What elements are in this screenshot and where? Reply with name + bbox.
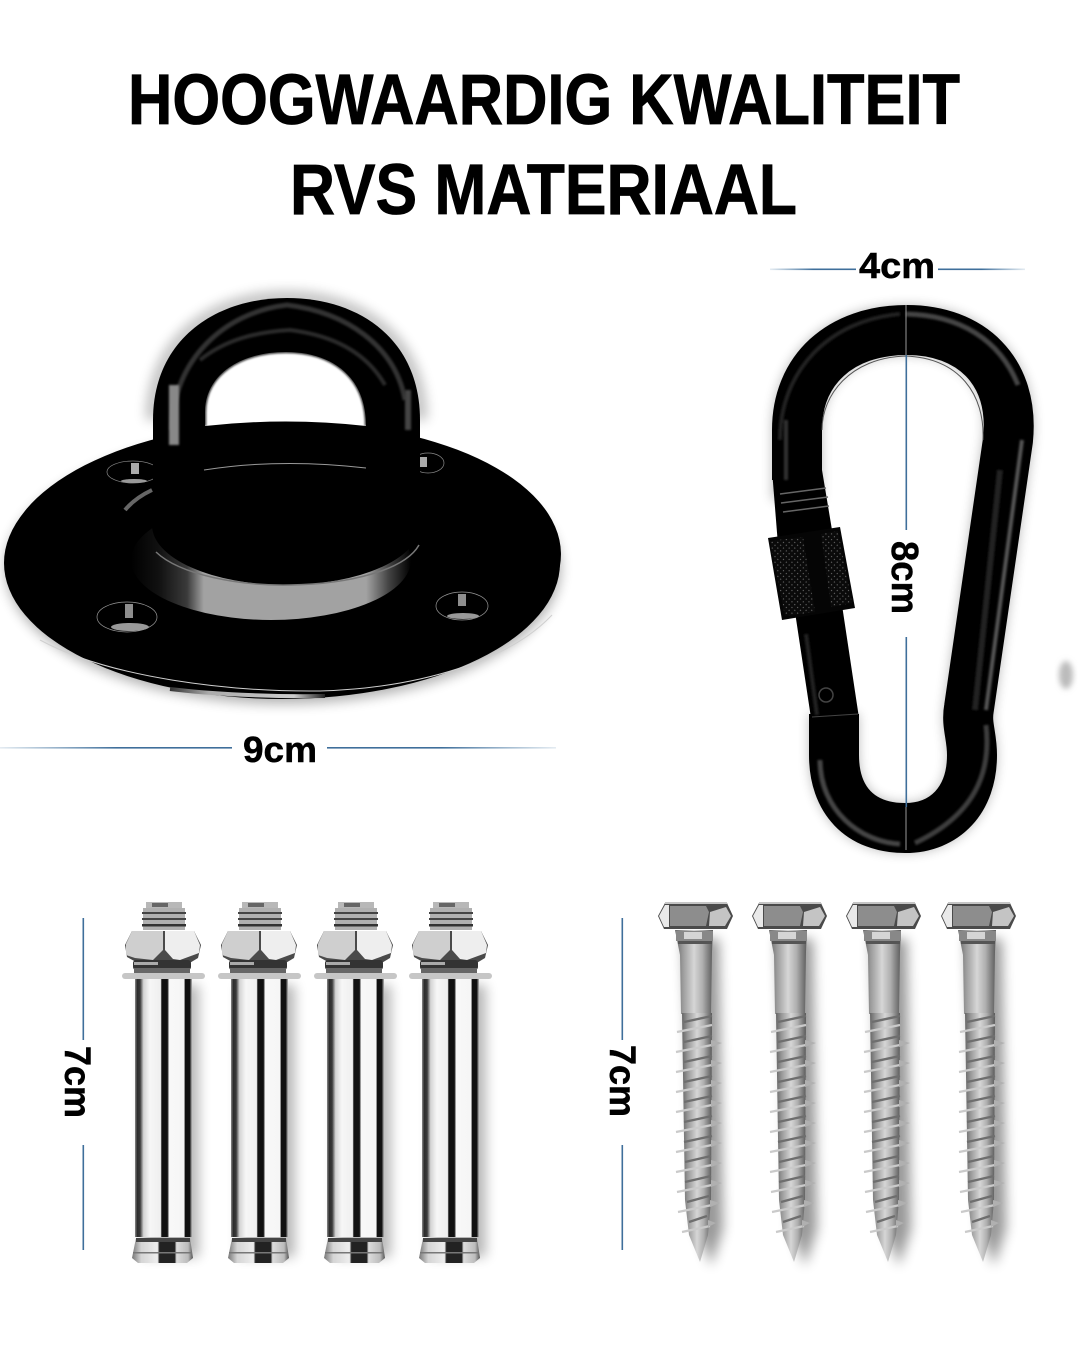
screw 1 (658, 902, 733, 1266)
dimension: 4cm: 4cm (859, 245, 935, 286)
wall plate with ring (3, 298, 563, 704)
title: RVS MATERIAAL (290, 151, 797, 230)
lag screws (658, 902, 1016, 1266)
screw 2 (752, 902, 827, 1266)
tube highlights (780, 314, 1022, 844)
title (128, 61, 960, 230)
bolt 2 (218, 902, 301, 1263)
mounting holes (97, 453, 488, 632)
dimension: bolts 7cm: 7cm (57, 1046, 98, 1118)
dimension: screws 7cm: 7cm (602, 1045, 643, 1117)
carabiner (768, 305, 1022, 850)
ring (153, 298, 420, 540)
pin (819, 688, 833, 702)
boss (152, 465, 420, 585)
dimension: 8cm: 8cm (883, 541, 925, 614)
bolt 4 (409, 902, 492, 1263)
knurled collar (768, 527, 855, 620)
dimension: 9cm: 9cm (243, 729, 317, 770)
bolt 1 (122, 902, 205, 1263)
screw 3 (846, 902, 921, 1266)
bolt 3 (314, 902, 397, 1263)
expansion bolts (122, 902, 492, 1263)
boss band (131, 500, 411, 620)
screw 4 (941, 902, 1016, 1266)
rim highlight (40, 615, 552, 696)
title: HOOGWAARDIG KWALITEIT (128, 61, 960, 140)
screw thread (780, 488, 829, 512)
